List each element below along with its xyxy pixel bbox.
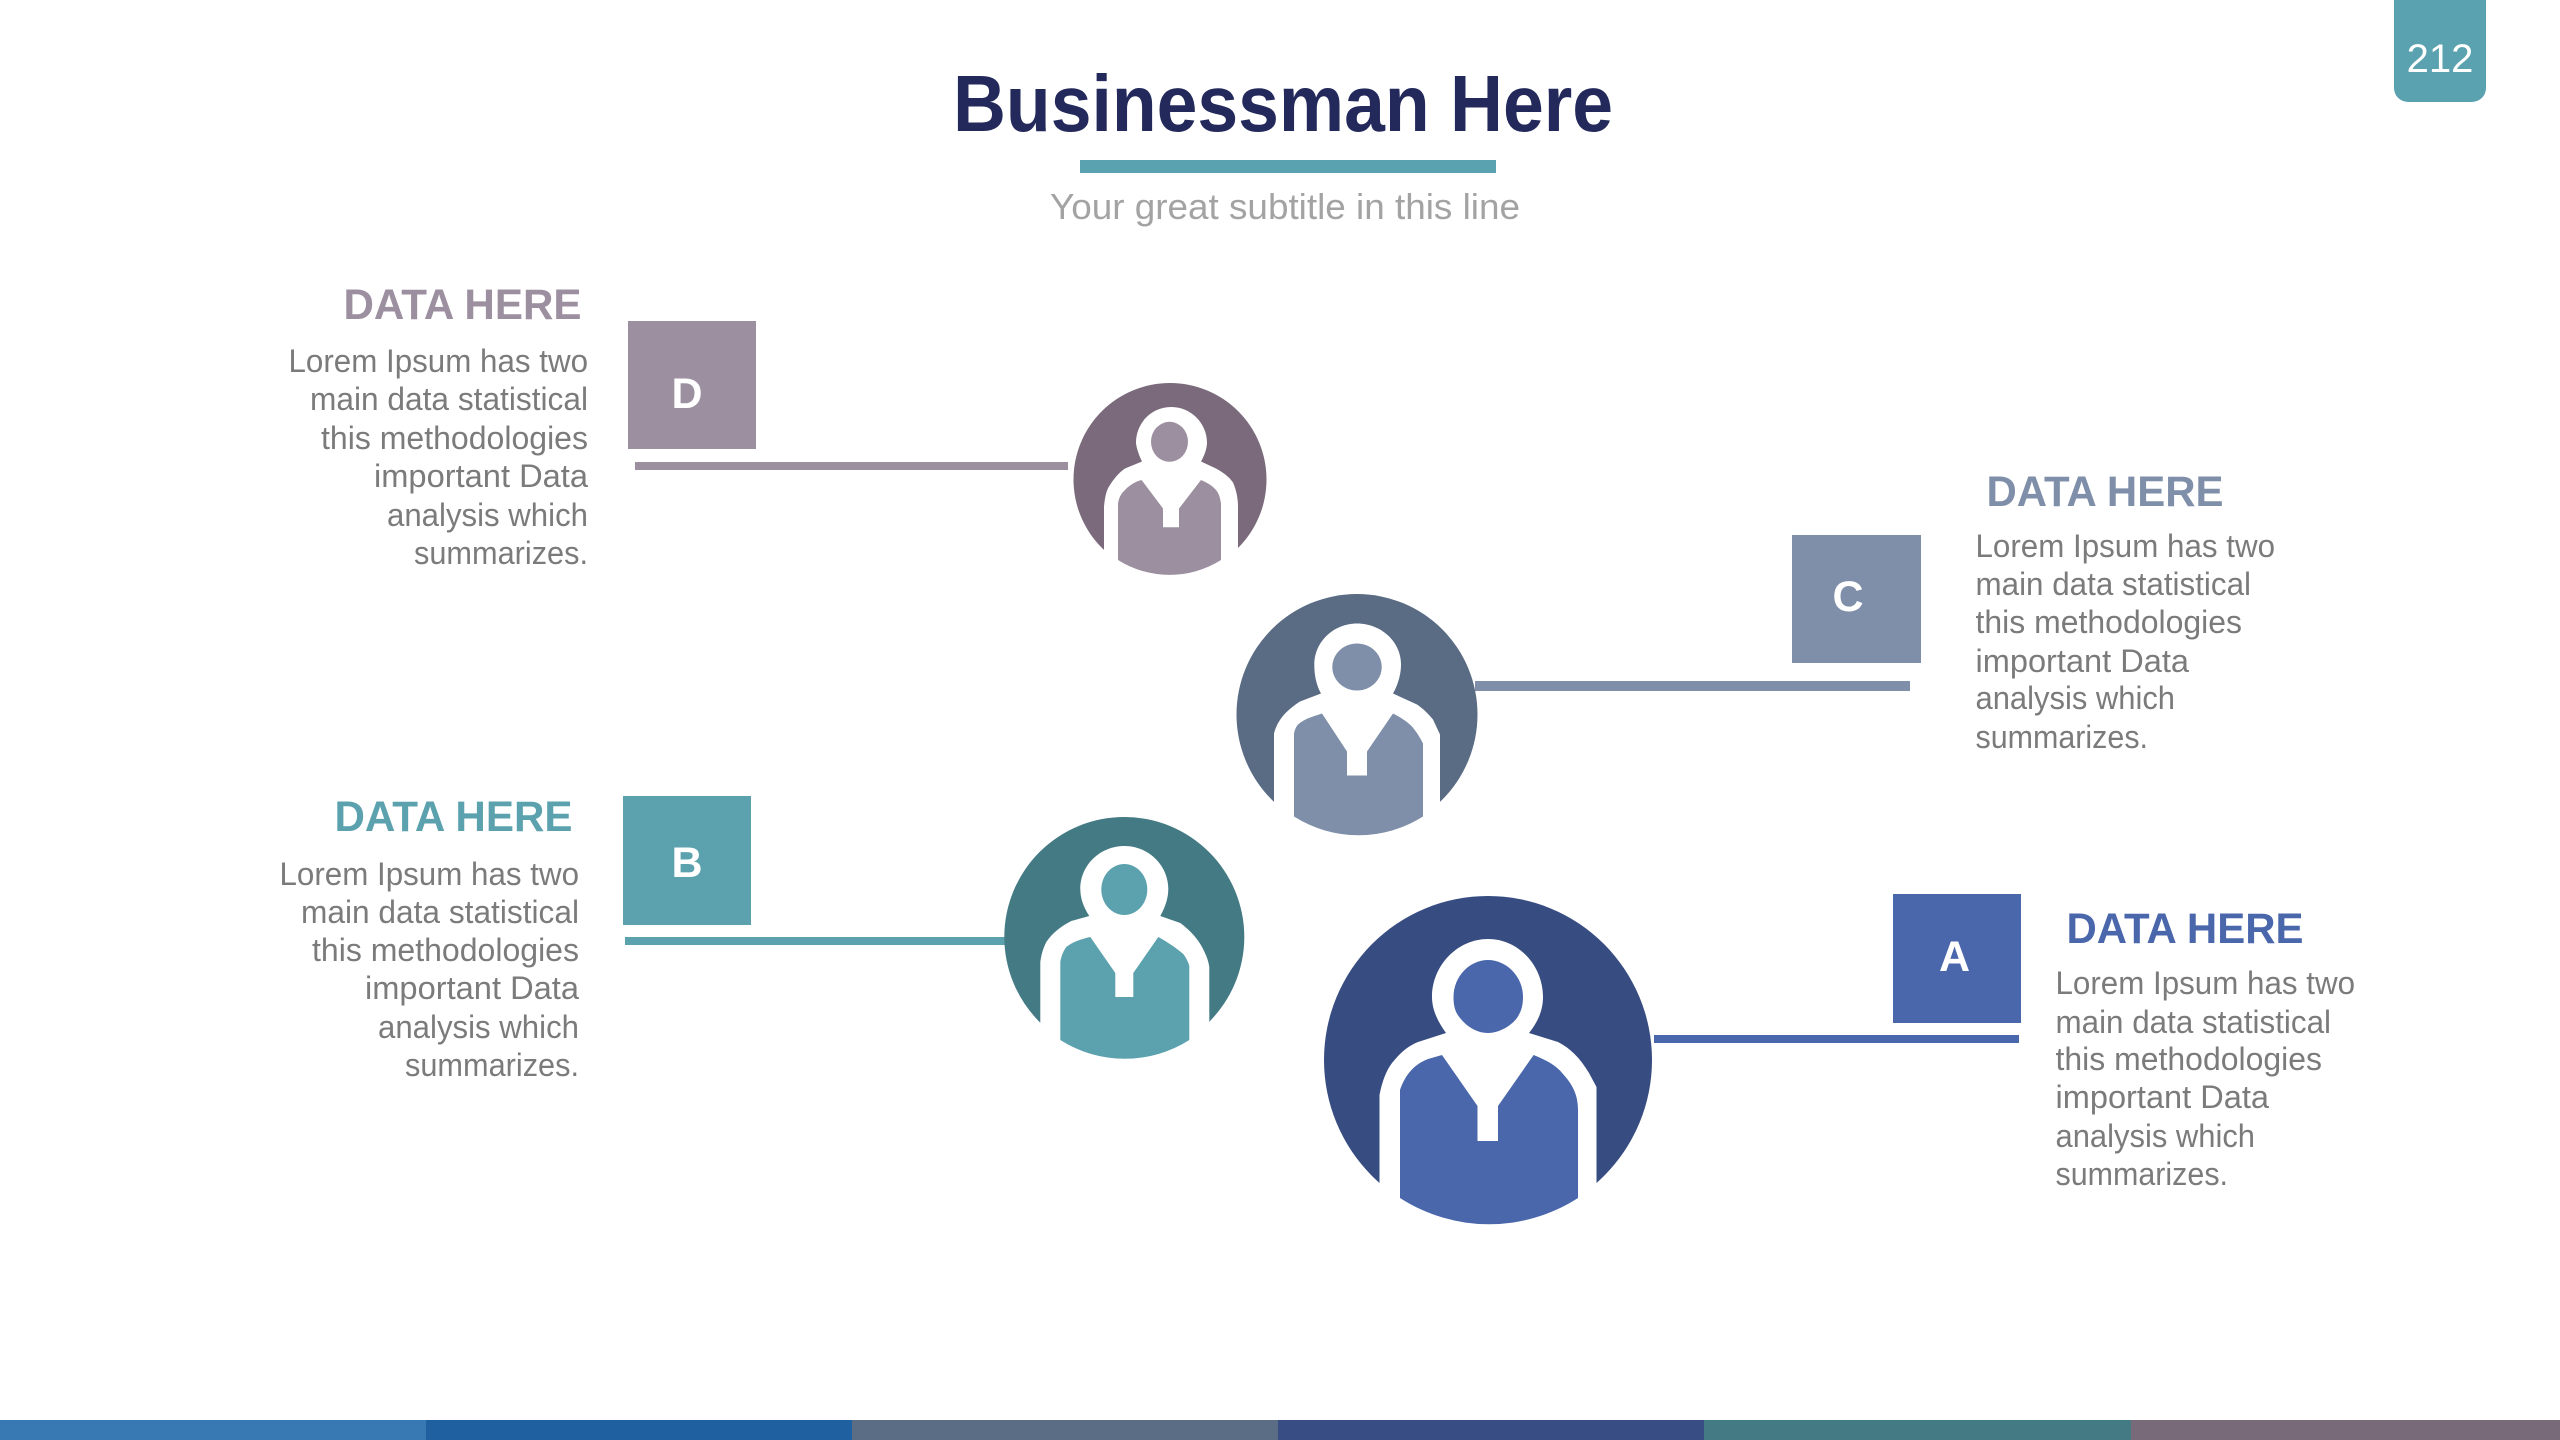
badge D: D	[671, 370, 703, 418]
body text A: analysis which	[2056, 1118, 2255, 1154]
heading D: DATA HERE	[344, 281, 582, 329]
body text A: summarizes.	[2056, 1156, 2228, 1192]
badge A: A	[1939, 933, 1970, 981]
body text C: Lorem Ipsum has two	[1976, 528, 2275, 564]
body text D: important Data	[374, 458, 588, 494]
heading B: DATA HERE	[334, 793, 572, 841]
connector line B	[625, 937, 1010, 945]
panel: data A	[1324, 894, 2355, 1235]
badge B: B	[671, 839, 703, 887]
body text D	[288, 343, 588, 571]
body text C: important Data	[1976, 643, 2189, 679]
connector line D	[635, 462, 1068, 470]
badge B	[623, 796, 751, 925]
body text A: this methodologies	[2056, 1041, 2322, 1077]
body text D: this methodologies	[321, 420, 588, 456]
body text A: Lorem Ipsum has two	[2056, 965, 2355, 1001]
body text A	[2056, 965, 2355, 1192]
page number tab: 212	[2407, 37, 2473, 81]
body text C: analysis which	[1976, 680, 2175, 716]
body text C: summarizes.	[1976, 719, 2148, 755]
heading A: DATA HERE	[2066, 905, 2304, 953]
body text D: main data statistical	[310, 381, 588, 417]
body text B: this methodologies	[312, 932, 579, 968]
badge C	[1792, 535, 1921, 663]
body text C	[1976, 528, 2275, 755]
footer colour strip	[0, 1420, 2560, 1440]
icon: businessman C	[1236, 594, 1478, 844]
body text D: summarizes.	[414, 535, 588, 571]
body text B: important Data	[365, 970, 579, 1006]
heading C: DATA HERE	[1986, 468, 2224, 516]
body text C: main data statistical	[1976, 566, 2251, 602]
panel: data B	[280, 793, 1244, 1083]
body text B	[280, 856, 579, 1083]
title: Businessman Here	[953, 59, 1613, 148]
body text B: main data statistical	[301, 894, 579, 930]
body text D: Lorem Ipsum has two	[288, 343, 588, 379]
title underline	[1080, 160, 1496, 173]
panel: data D	[288, 281, 1266, 584]
body text B: analysis which	[378, 1009, 579, 1045]
body text B: Lorem Ipsum has two	[280, 856, 579, 892]
icon: businessman A	[1324, 896, 1652, 1235]
badge A	[1893, 894, 2021, 1023]
body text A: main data statistical	[2056, 1004, 2331, 1040]
panel: data C	[1236, 468, 2275, 844]
body text B: summarizes.	[405, 1047, 579, 1083]
icon: businessman D	[1074, 383, 1266, 584]
connector line C	[1475, 681, 1910, 691]
icon: businessman B	[1004, 817, 1244, 1067]
body text D: analysis which	[387, 497, 588, 533]
connector line A	[1654, 1035, 2019, 1043]
badge D	[628, 321, 756, 449]
body text A: important Data	[2056, 1079, 2269, 1115]
page number tab	[2394, 0, 2486, 102]
badge C: C	[1832, 573, 1864, 621]
body text C: this methodologies	[1976, 604, 2242, 640]
subtitle: Your great subtitle in this line	[1050, 186, 1520, 227]
